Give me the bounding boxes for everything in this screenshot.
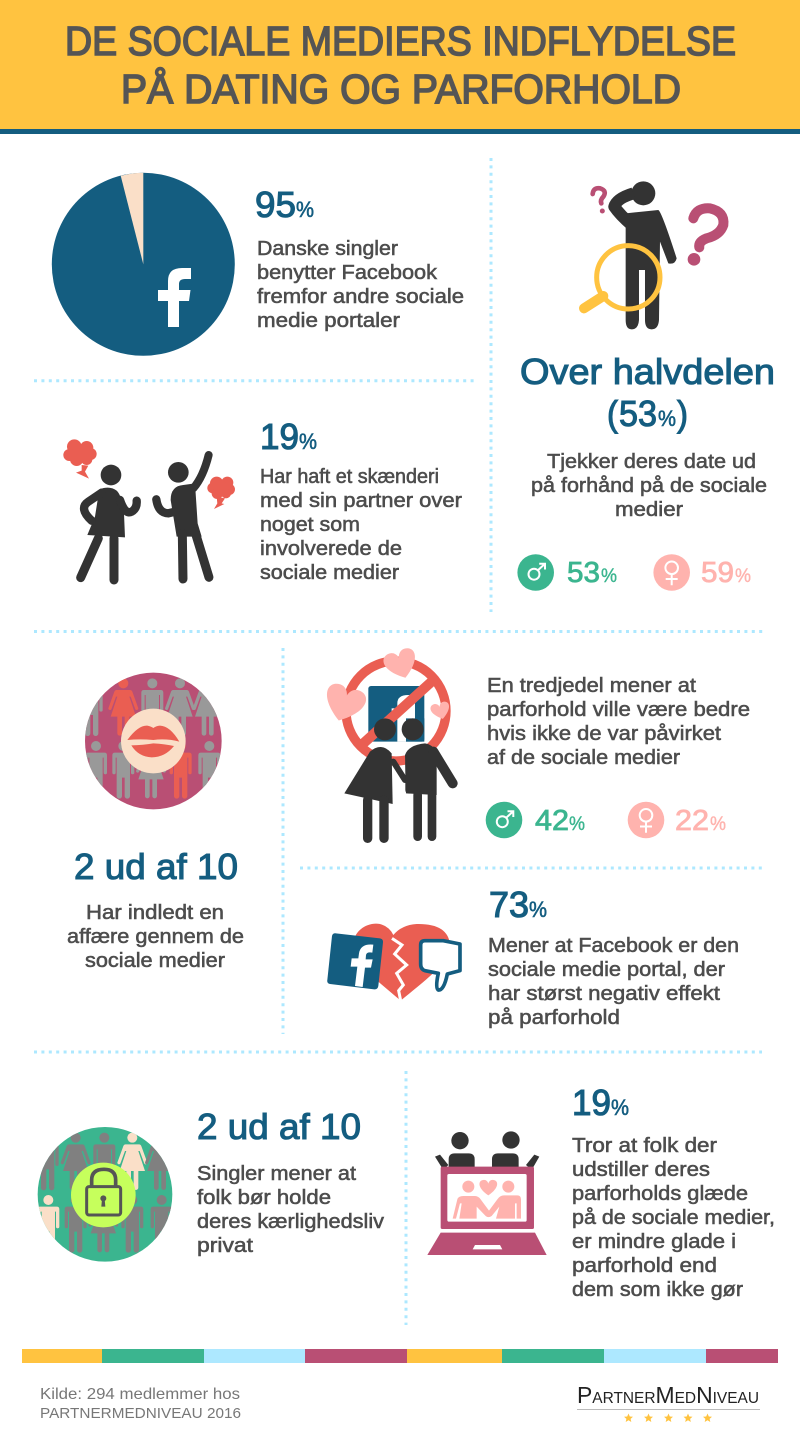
text: Facebook description: Danske singler xyxy=(257,238,398,260)
text: checks date: medier xyxy=(615,499,683,521)
heading: over halvdelen: Over halvdelen xyxy=(520,351,775,392)
icon: female symbol xyxy=(653,554,690,591)
stat: male 42% xyxy=(535,805,585,837)
stat: female 59%: % xyxy=(735,566,751,587)
stat: 95%: 95 xyxy=(255,184,296,225)
text: Facebook negative effect: sociale medie portal, der xyxy=(488,959,725,981)
stat: male 42%: 42 xyxy=(535,805,569,837)
text: quarrel description: sociale medier xyxy=(260,562,399,584)
title: DE SOCIALE MEDIERS INDFLYDELSE xyxy=(65,18,736,64)
text: Facebook negative effect: på parforhold xyxy=(488,1007,620,1029)
stat: male 53% xyxy=(567,557,617,589)
header banner xyxy=(0,0,800,134)
stat: female 22% xyxy=(675,805,726,837)
text: Facebook description: fremfor andre sociale xyxy=(257,286,464,308)
text: one third description: En tredjedel mener at xyxy=(487,675,696,697)
text: singles description: folk bør holde xyxy=(197,1187,331,1209)
stat: 73% xyxy=(489,884,547,925)
text: Facebook description xyxy=(257,238,464,332)
text: singles description xyxy=(197,1163,384,1257)
text: checks date xyxy=(531,451,767,521)
stat: female 22%: % xyxy=(710,814,726,835)
text: affair description xyxy=(67,902,244,972)
text: Facebook description: benytter Facebook xyxy=(257,262,438,284)
icon: couple behind laptop xyxy=(427,1131,547,1255)
panel: 19% relationship happiness xyxy=(427,1082,775,1301)
stat: 19%: 19 xyxy=(572,1082,611,1123)
stat: 2 ud af 10: 2 ud af 10 xyxy=(74,846,238,887)
text: one third description: parforhold ville være bedre xyxy=(487,699,750,721)
stat: male 53%: 53 xyxy=(567,557,600,589)
text: one third description: af de sociale medier xyxy=(487,747,680,769)
panel: 73% negative effect xyxy=(327,884,739,1029)
stat: (53%): ) xyxy=(677,393,688,434)
panel: over halvdelen xyxy=(517,181,775,591)
icon: female symbol xyxy=(628,802,664,838)
text: Facebook negative effect: Mener at Facebook er den xyxy=(488,935,739,957)
icon: person with magnifier xyxy=(584,181,723,329)
colour stripe xyxy=(22,1349,778,1363)
text: Facebook negative effect: har størst negativ effekt xyxy=(488,983,720,1005)
text: happiness description: parforholds glæde xyxy=(572,1183,748,1205)
text: happiness description: dem som ikke gør xyxy=(572,1279,743,1301)
panel: 95% Facebook xyxy=(52,173,464,356)
logo: PartnerMedNiveau xyxy=(577,1382,760,1422)
text: singles description: privat xyxy=(197,1235,254,1257)
source note xyxy=(40,1386,241,1422)
text: quarrel description: involverede de xyxy=(260,538,402,560)
title xyxy=(65,18,736,112)
stat: 2 ud af 10: 2 ud af 10 xyxy=(197,1106,361,1147)
icon: arguing couple xyxy=(63,439,235,580)
text: happiness description: udstiller deres xyxy=(572,1159,710,1181)
stat: female 59%: 59 xyxy=(701,557,734,589)
text: quarrel description: noget som xyxy=(260,514,360,536)
stat: 19%: % xyxy=(611,1095,629,1120)
text: affair description: sociale medier xyxy=(85,950,225,972)
stat: 19%: 19 xyxy=(260,416,299,457)
icon: male symbol xyxy=(486,802,522,838)
text: checks date: på forhånd på de sociale xyxy=(531,475,767,497)
stat: 73%: % xyxy=(529,897,547,922)
icon: broken heart with Facebook and thumb down xyxy=(327,924,460,1001)
text: happiness description: parforhold end xyxy=(572,1255,717,1277)
stat: male 53%: % xyxy=(601,566,617,587)
stat: male 42%: % xyxy=(569,814,585,835)
text: happiness description: er mindre glade i xyxy=(572,1231,736,1253)
text: checks date: Tjekker deres date ud xyxy=(547,451,756,473)
stat: (53%): 53 xyxy=(619,393,657,434)
icon: lips over crowd xyxy=(81,673,223,809)
pie chart with Facebook logo xyxy=(52,173,235,356)
text: Facebook description: medie portaler xyxy=(257,310,400,332)
text: quarrel description: med sin partner over xyxy=(260,490,462,512)
text: one third description xyxy=(487,675,750,769)
panel: one third xyxy=(320,646,750,838)
panel: 19% quarrel xyxy=(63,416,462,584)
stat: 73%: 73 xyxy=(489,884,529,925)
stat: (53%): % xyxy=(658,406,676,431)
text: quarrel description: Har haft et skænderi xyxy=(260,466,439,488)
text: affair description: Har indledt en xyxy=(86,902,224,924)
text: singles description: deres kærlighedsliv xyxy=(197,1211,384,1233)
stat: female 22%: 22 xyxy=(675,805,709,837)
icon: lock over crowd xyxy=(37,1127,175,1262)
logo: PartnerMedNiveau: PARTNERMEDNIVEAU xyxy=(577,1382,759,1408)
text: happiness description: Tror at folk der xyxy=(572,1135,717,1157)
title: PÅ DATING OG PARFORHOLD xyxy=(121,66,681,112)
panel: affairs xyxy=(67,673,244,972)
text: Facebook negative effect xyxy=(488,935,739,1029)
text: happiness description: på de sociale medier, xyxy=(572,1207,775,1229)
stat: female 59% xyxy=(701,557,751,589)
source note: PARTNERMEDNIVEAU 2016 xyxy=(40,1405,241,1422)
stat: (53%): ( xyxy=(607,393,618,434)
stat: 19%: % xyxy=(299,429,317,454)
icon: couple with banned Facebook xyxy=(320,646,453,838)
text: happiness description xyxy=(572,1135,775,1301)
icon: male symbol xyxy=(517,554,554,591)
source note: Kilde: 294 medlemmer hos xyxy=(40,1386,240,1403)
text: quarrel description xyxy=(260,466,462,584)
stat: 95% xyxy=(255,184,314,225)
text: one third description: hvis ikke de var påvirket xyxy=(487,723,721,745)
text: singles description: Singler mener at xyxy=(197,1163,356,1185)
stat: (53%) xyxy=(607,393,688,434)
text: affair description: affære gennem de xyxy=(67,926,244,948)
stat: 95%: % xyxy=(296,197,314,222)
panel: private love life xyxy=(37,1106,384,1262)
